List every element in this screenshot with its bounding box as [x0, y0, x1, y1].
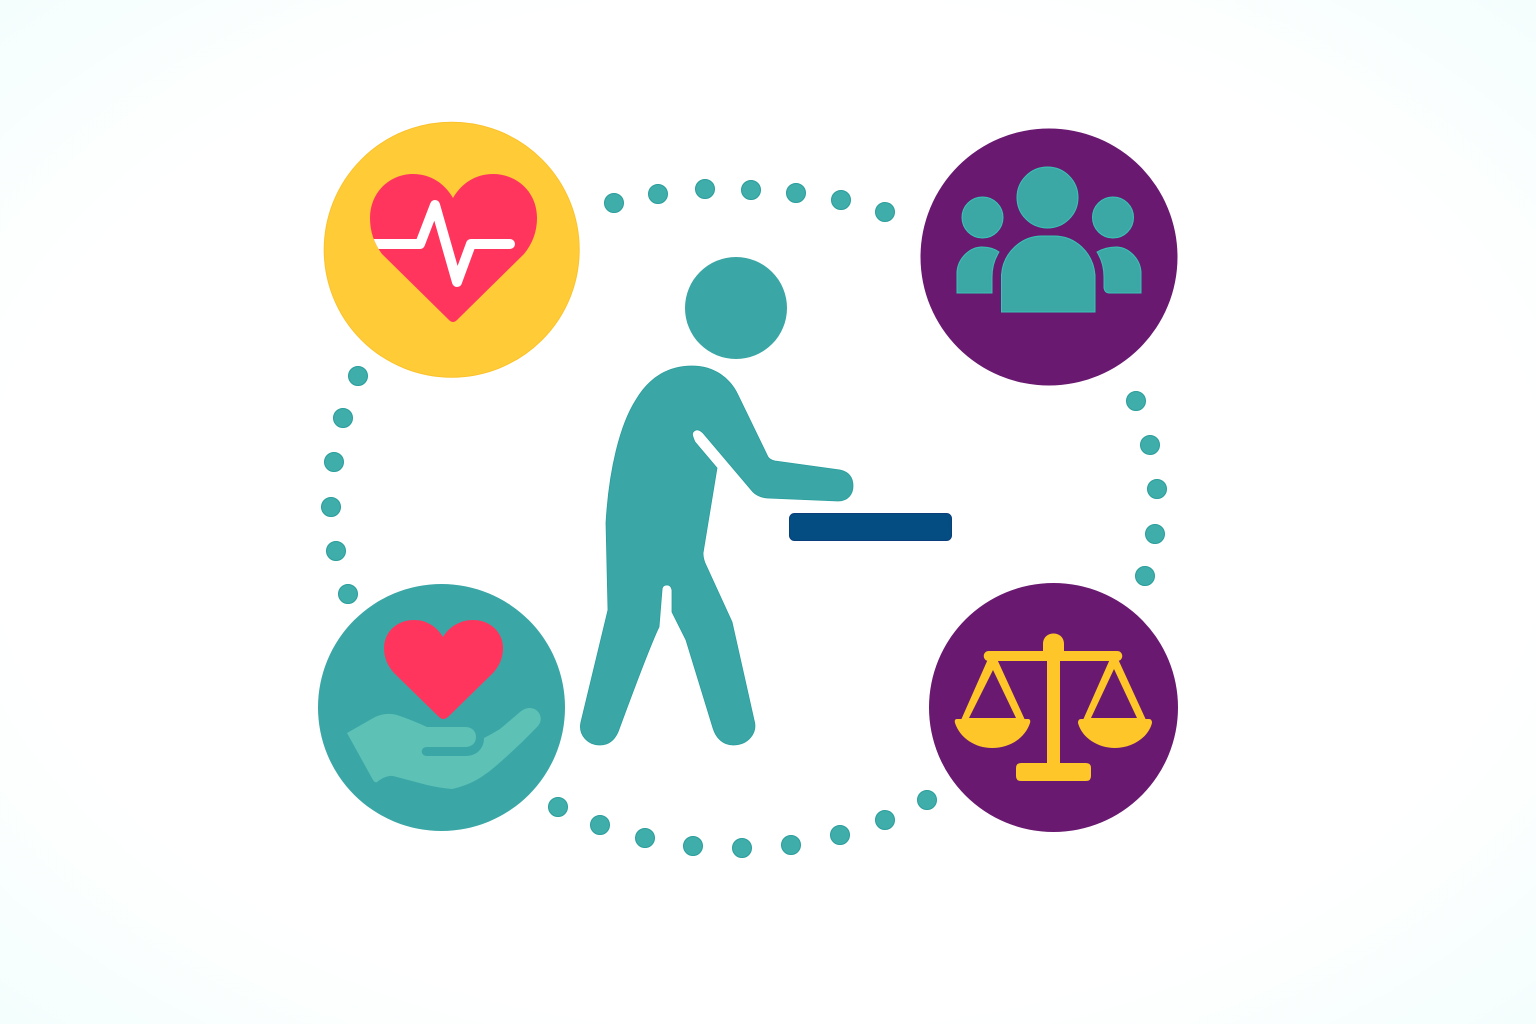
dotted connector: left: [322, 366, 368, 604]
icon: caring hand with heart on teal circle: [318, 584, 565, 831]
dotted connector: right: [1126, 392, 1166, 586]
icon: balance scale on purple circle: [929, 583, 1178, 832]
figure head: [685, 257, 787, 359]
dotted connector: top: [604, 180, 894, 222]
central figure reaching toward a bar: [580, 257, 853, 745]
icon: health heart with pulse on yellow circle: [324, 122, 579, 377]
figure body: [580, 366, 853, 745]
navy bar: [790, 514, 952, 540]
dotted connector: bottom: [548, 790, 936, 858]
icon: community group on purple circle: [920, 128, 1178, 386]
